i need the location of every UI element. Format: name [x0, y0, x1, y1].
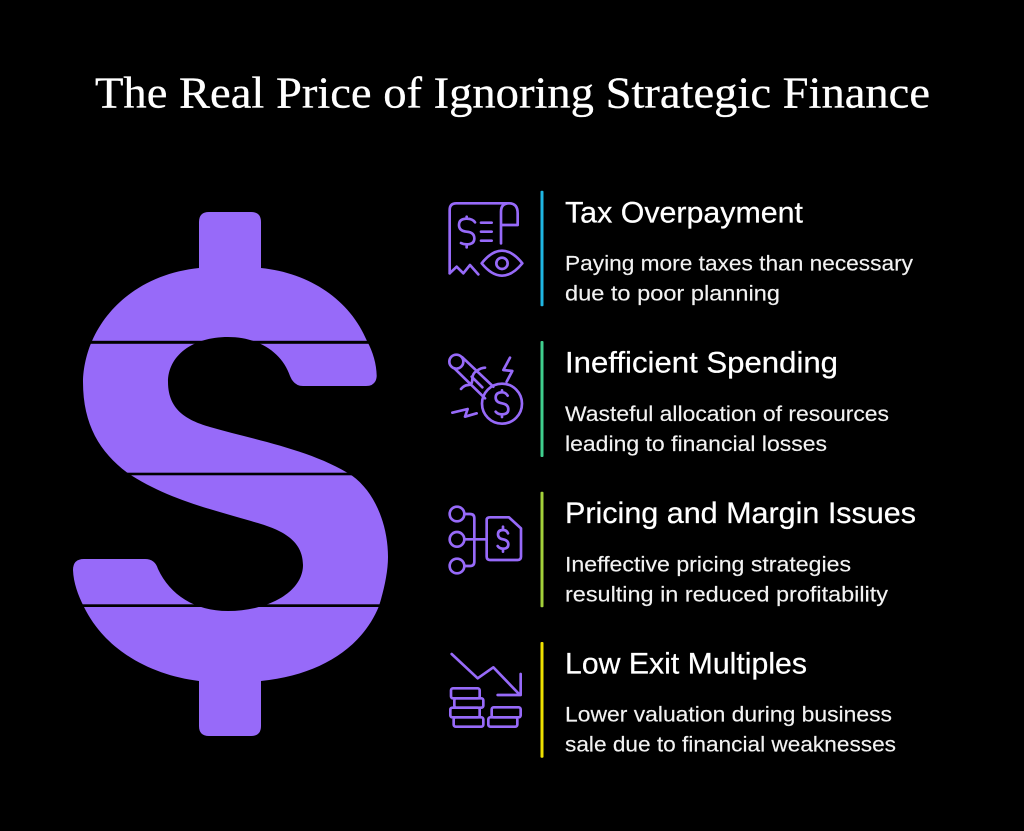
description [565, 402, 889, 456]
heading: Inefficient Spending [565, 347, 838, 380]
description: Lower valuation during business [565, 703, 892, 727]
heading: Low Exit Multiples [565, 647, 807, 680]
description [565, 252, 913, 306]
item: pricing and margin issues [450, 492, 916, 607]
description: resulting in reduced profitability [565, 582, 888, 606]
divider bar: blue [540, 191, 544, 306]
description: Paying more taxes than necessary [565, 252, 913, 276]
icon: branching nodes to price document [450, 507, 521, 573]
description: Ineffective pricing strategies [565, 552, 851, 576]
item: inefficient spending [449, 341, 889, 457]
item: low exit multiples [450, 642, 896, 758]
description: sale due to financial weaknesses [565, 733, 896, 757]
divider bar: yellow [540, 642, 544, 758]
heading: Tax Overpayment [565, 196, 804, 229]
description: Wasteful allocation of resources [565, 402, 889, 426]
description: leading to financial losses [565, 432, 827, 456]
item: tax overpayment [450, 191, 913, 306]
heading: Pricing and Margin Issues [565, 497, 916, 530]
description: due to poor planning [565, 282, 780, 306]
icon: falling arrow over coin stacks [450, 654, 521, 727]
title: The Real Price of Ignoring Strategic Finance [95, 68, 930, 118]
icon: large dollar sign [70, 212, 390, 736]
divider bar: lime [540, 492, 544, 607]
description [565, 552, 888, 606]
divider bar: green [540, 341, 544, 457]
icon: burning dollar with key [449, 355, 522, 424]
description [565, 703, 896, 757]
icon: receipt with eye [450, 203, 522, 276]
